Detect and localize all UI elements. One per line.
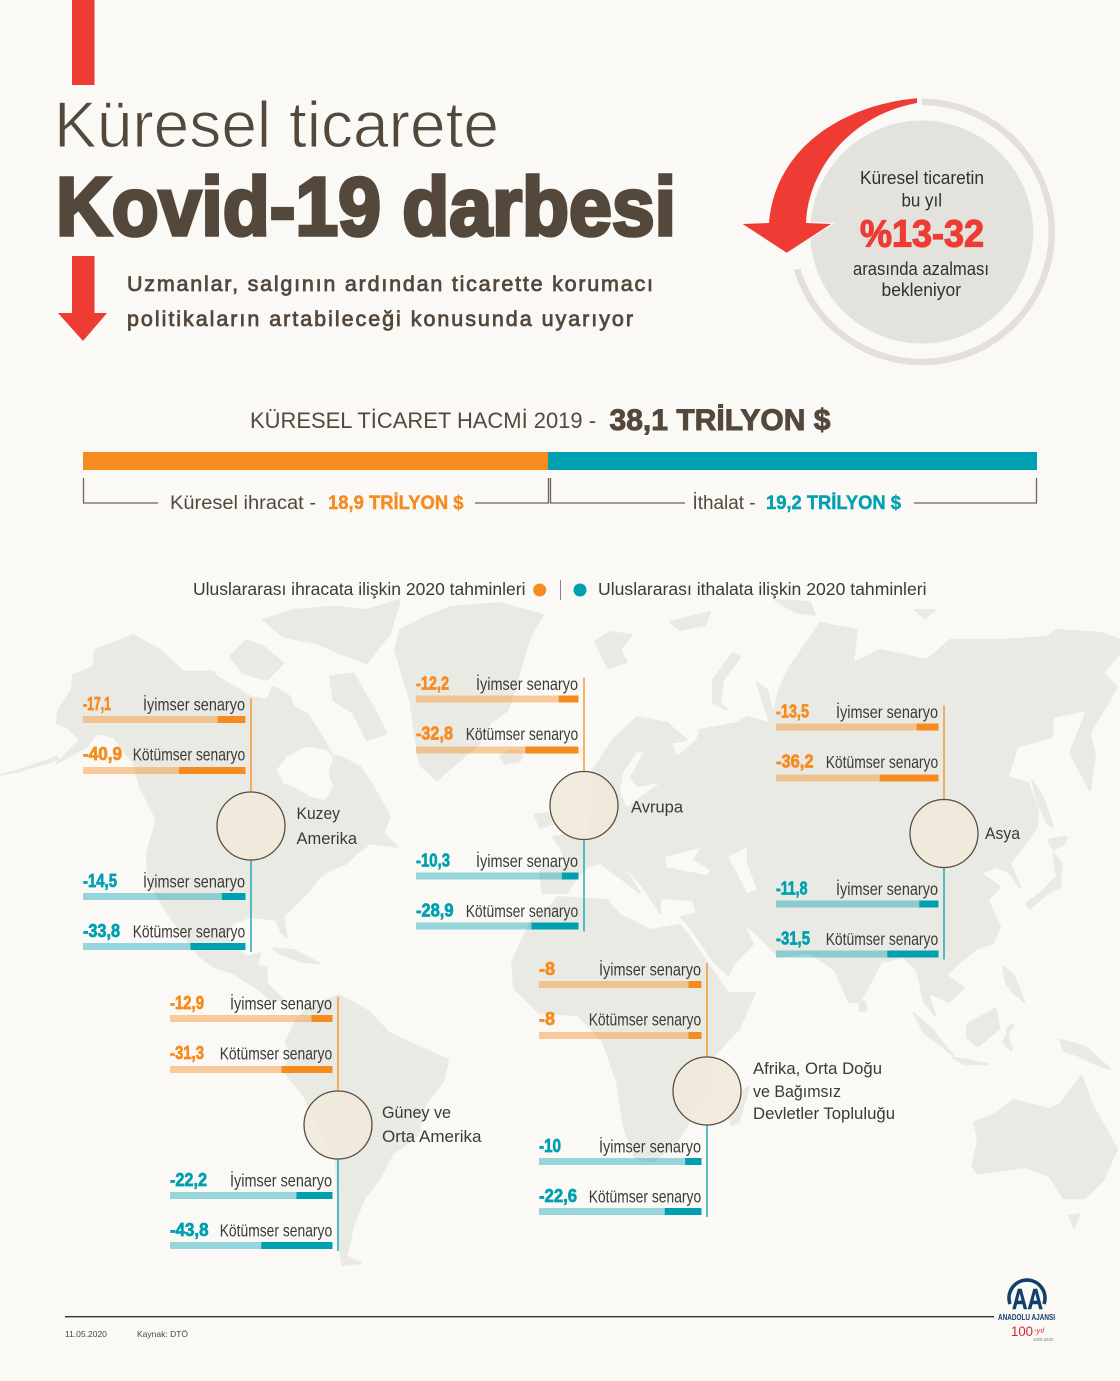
panel: Africa, Middle East and CIS: -22,6 xyxy=(539,1186,577,1206)
panel: North America: Kuzey xyxy=(296,804,340,823)
panel: South and Central America xyxy=(170,993,482,1251)
panel: South and Central America: Kötümser senaryo xyxy=(220,1220,332,1240)
callout text: bekleniyor xyxy=(882,280,961,300)
title line 2: Kovid-19 darbesi xyxy=(56,160,676,253)
panel: South and Central America: Orta Amerika xyxy=(382,1127,482,1146)
red bar top xyxy=(72,0,94,85)
logo: Anadolu Ajansi xyxy=(998,1280,1055,1342)
panel: Europe: Kötümser senaryo xyxy=(466,901,578,921)
stacked bar: export and import xyxy=(83,452,1037,470)
panel: Africa, Middle East and CIS: İyimser senaryo xyxy=(599,960,701,980)
panel: Africa, Middle East and CIS: -10 xyxy=(539,1136,561,1156)
panel: Europe: -28,9 xyxy=(416,900,454,920)
icon: curved red arrow xyxy=(743,98,917,253)
title xyxy=(54,88,676,253)
panel: Europe: -32,8 xyxy=(416,724,453,744)
panel: North America xyxy=(83,694,358,952)
footer line and source: Kaynak: DTÖ xyxy=(137,1329,188,1339)
world map background xyxy=(0,600,1120,1265)
footer line and source: 11.05.2020 xyxy=(65,1329,107,1339)
panel: South and Central America: -43,8 xyxy=(170,1220,208,1240)
panel: Africa, Middle East and CIS: Kötümser senaryo xyxy=(589,1186,701,1206)
panel: Europe: -12,2 xyxy=(416,674,449,694)
panel: South and Central America: -12,9 xyxy=(170,993,204,1013)
panel: North America: -14,5 xyxy=(83,871,117,891)
panel: Asia: Asya xyxy=(985,824,1021,843)
legend xyxy=(193,579,926,600)
inner disc xyxy=(810,120,1033,344)
outer ring xyxy=(797,102,1052,362)
panel: Asia: -36,2 xyxy=(776,752,814,772)
panel: Asia: Kötümser senaryo xyxy=(826,929,938,949)
panel: Africa, Middle East and CIS: -8 xyxy=(539,959,555,979)
panel: Asia: -13,5 xyxy=(776,702,809,722)
panel: North America: Kötümser senaryo xyxy=(133,922,245,942)
panel: Africa, Middle East and CIS: Devletler Topluluğu xyxy=(753,1104,895,1123)
panel: Africa, Middle East and CIS: İyimser senaryo xyxy=(599,1136,701,1156)
footer line and source xyxy=(65,1317,994,1339)
bracket: import: 19,2 TRİLYON $ xyxy=(766,493,901,514)
bracket: import: İthalat - xyxy=(692,493,756,514)
panel: Africa, Middle East and CIS xyxy=(539,959,895,1217)
legend: Uluslararası ithalata ilişkin 2020 tahminleri xyxy=(598,579,926,599)
panel: Europe: Avrupa xyxy=(631,798,684,816)
panel: Africa, Middle East and CIS: -8 xyxy=(539,1009,555,1029)
callout: decline forecast circle xyxy=(743,98,1052,362)
panel: North America: -40,9 xyxy=(83,744,122,764)
Africa xyxy=(512,897,755,1162)
bracket: global export: 18,9 TRİLYON $ xyxy=(328,493,464,514)
callout text: bu yıl xyxy=(902,190,942,210)
panel: Asia xyxy=(776,702,1021,960)
callout text: Küresel ticaretin xyxy=(860,168,984,188)
panel: Africa, Middle East and CIS: ve Bağımsız xyxy=(753,1082,841,1101)
logo: Anadolu Ajansi: 1920-2020 xyxy=(1033,1337,1053,1342)
heading: global trade volume 2019 xyxy=(250,404,831,437)
subtitle: politikaların artabileceği konusunda uyarıyor xyxy=(127,307,633,331)
panel: North America: -33,8 xyxy=(83,921,120,941)
panel: Africa, Middle East and CIS: Kötümser senaryo xyxy=(589,1010,701,1030)
callout text: %13-32 xyxy=(860,214,984,256)
title line 1: Küresel ticarete xyxy=(54,88,499,161)
panel: North America: Amerika xyxy=(296,829,358,848)
heading: global trade volume 2019: 38,1 TRİLYON $ xyxy=(610,404,831,437)
panel: Europe: İyimser senaryo xyxy=(476,674,578,694)
panel: South and Central America: Güney ve xyxy=(382,1103,451,1122)
panel: Asia: İyimser senaryo xyxy=(836,702,938,722)
panel: North America: İyimser senaryo xyxy=(143,694,245,714)
logo: Anadolu Ajansi: AA xyxy=(1012,1284,1043,1316)
panel: Asia: Kötümser senaryo xyxy=(826,752,938,772)
panel: Europe: İyimser senaryo xyxy=(476,851,578,871)
panel: Asia: -11,8 xyxy=(776,878,808,898)
bracket: global export: Küresel ihracat - xyxy=(170,493,316,514)
callout text: arasında azalması xyxy=(853,259,989,279)
panel: Europe xyxy=(416,674,684,932)
panel: South and Central America: Kötümser senaryo xyxy=(220,1044,332,1064)
logo: Anadolu Ajansi: -yıl xyxy=(1034,1326,1044,1335)
panel: South and Central America: İyimser senaryo xyxy=(230,1170,332,1190)
panel: North America: -17,1 xyxy=(83,694,111,714)
panel: Europe: -10,3 xyxy=(416,850,450,870)
logo: Anadolu Ajansi: ANADOLU AJANSI xyxy=(998,1312,1055,1322)
panel: South and Central America: -31,3 xyxy=(170,1043,204,1063)
bracket: import xyxy=(550,478,1036,514)
panel: South and Central America: İyimser senaryo xyxy=(230,994,332,1014)
subtitle: Uzmanlar, salgının ardından ticarette korumacı xyxy=(127,272,653,296)
heading: global trade volume 2019: KÜRESEL TİCARET HACMİ 2019 - xyxy=(250,408,596,433)
panel: Asia: -31,5 xyxy=(776,928,810,948)
panel: North America: İyimser senaryo xyxy=(143,872,245,892)
Eurasia xyxy=(540,623,1120,1015)
subtitle xyxy=(127,272,653,331)
panel: North America: Kötümser senaryo xyxy=(133,744,245,764)
legend: Uluslararası ihracata ilişkin 2020 tahminleri xyxy=(193,579,526,599)
logo: Anadolu Ajansi: 100 xyxy=(1011,1323,1033,1339)
callout text xyxy=(853,168,989,300)
panel: Asia: İyimser senaryo xyxy=(836,879,938,899)
panel: Europe: Kötümser senaryo xyxy=(466,724,578,744)
panel: Africa, Middle East and CIS: Afrika, Orta Doğu xyxy=(753,1059,882,1078)
icon: red down arrow xyxy=(58,256,107,341)
panel: South and Central America: -22,2 xyxy=(170,1170,207,1190)
bracket: global export xyxy=(84,478,548,514)
